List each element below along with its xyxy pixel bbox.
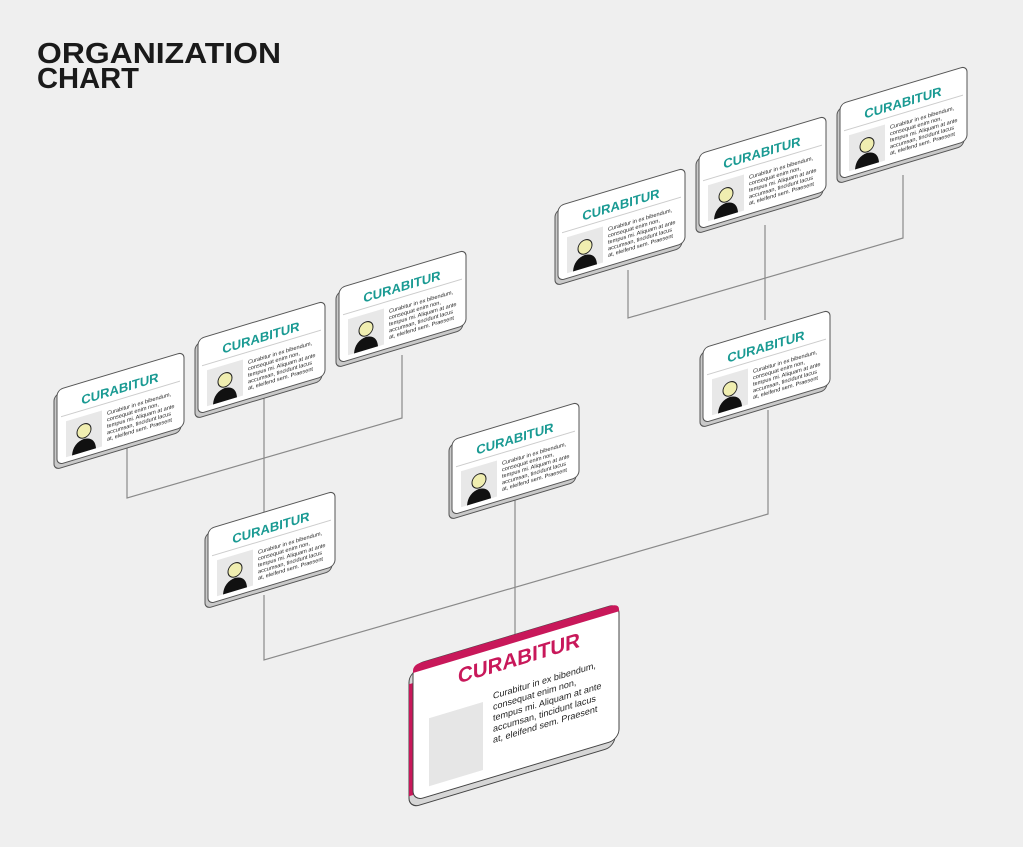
card A (54, 352, 184, 470)
card H: CURABITUR (864, 84, 942, 122)
card B: at, eleifend sem. Praesent (248, 366, 313, 392)
card G: CURABITUR (723, 134, 801, 172)
card G: consequat enim non, (749, 166, 801, 187)
card F: accumsan, tincidunt lacus (608, 227, 672, 252)
avatar (708, 174, 744, 221)
card I: CURABITUR (727, 328, 805, 366)
card G: Curabitur in ex bibendum, (749, 156, 813, 181)
card F: at, eleifend sem. Praesent (608, 233, 673, 259)
avatar (849, 124, 885, 171)
title: ORGANIZATION (37, 38, 281, 70)
title (37, 38, 281, 95)
connector lines (127, 175, 903, 660)
card F: consequat enim non, (608, 218, 660, 239)
card A: tempus mi. Aliquam at ante (107, 404, 174, 430)
card B: accumsan, tincidunt lacus (248, 360, 312, 385)
card E: CURABITUR (476, 420, 554, 458)
card I (700, 310, 830, 428)
card C (336, 250, 466, 368)
card D: CURABITUR (232, 509, 310, 547)
avatar (348, 308, 384, 355)
card E: accumsan, tincidunt lacus (502, 461, 566, 486)
card B: Curabitur in ex bibendum, (248, 341, 312, 366)
avatar (712, 368, 748, 415)
avatar (567, 226, 603, 273)
card E: Curabitur in ex bibendum, (502, 442, 566, 467)
main card: CURABITUR (458, 628, 580, 688)
card F: CURABITUR (582, 186, 660, 224)
title: CHART (37, 63, 139, 95)
card A: accumsan, tincidunt lacus (107, 411, 171, 436)
avatar (207, 359, 243, 406)
card I: tempus mi. Aliquam at ante (753, 362, 820, 388)
main card: consequat enim non, (493, 677, 576, 712)
main card: tempus mi. Aliquam at ante (493, 681, 601, 723)
main card (409, 603, 619, 808)
card B: CURABITUR (222, 319, 300, 357)
main card: Curabitur in ex bibendum, (493, 660, 596, 701)
card I: consequat enim non, (753, 360, 805, 381)
card I: at, eleifend sem. Praesent (753, 375, 818, 401)
card A: at, eleifend sem. Praesent (107, 417, 172, 443)
card H: tempus mi. Aliquam at ante (890, 118, 957, 144)
card C: consequat enim non, (389, 300, 441, 321)
card H: Curabitur in ex bibendum, (890, 106, 954, 131)
card F: tempus mi. Aliquam at ante (608, 220, 675, 246)
card E: tempus mi. Aliquam at ante (502, 454, 569, 480)
avatar (217, 549, 253, 596)
card C: Curabitur in ex bibendum, (389, 290, 453, 315)
card B: consequat enim non, (248, 351, 300, 372)
card D: Curabitur in ex bibendum, (258, 531, 322, 556)
card F: Curabitur in ex bibendum, (608, 208, 672, 233)
card G: tempus mi. Aliquam at ante (749, 168, 816, 194)
card G: at, eleifend sem. Praesent (749, 181, 814, 207)
card E: consequat enim non, (502, 452, 554, 473)
card H: accumsan, tincidunt lacus (890, 125, 954, 150)
main card: at, eleifend sem. Praesent (493, 704, 598, 745)
card D: consequat enim non, (258, 541, 310, 562)
card H: consequat enim non, (890, 116, 942, 137)
card G (696, 116, 826, 234)
card B: tempus mi. Aliquam at ante (248, 353, 315, 379)
card C: tempus mi. Aliquam at ante (389, 302, 456, 328)
card D: tempus mi. Aliquam at ante (258, 543, 325, 569)
card H: at, eleifend sem. Praesent (890, 131, 955, 157)
card I: accumsan, tincidunt lacus (753, 369, 817, 394)
card D (205, 491, 335, 609)
avatar (461, 460, 497, 507)
card F (555, 168, 685, 286)
card A: Curabitur in ex bibendum, (107, 392, 171, 417)
card C: at, eleifend sem. Praesent (389, 315, 454, 341)
card C: CURABITUR (363, 268, 441, 306)
card C: accumsan, tincidunt lacus (389, 309, 453, 334)
card A: consequat enim non, (107, 402, 159, 423)
main card: accumsan, tincidunt lacus (493, 693, 596, 734)
card I: Curabitur in ex bibendum, (753, 350, 817, 375)
card H (837, 66, 967, 184)
card E (449, 402, 579, 520)
card D: accumsan, tincidunt lacus (258, 550, 322, 575)
card A: CURABITUR (81, 370, 159, 408)
avatar (66, 410, 102, 457)
card G: accumsan, tincidunt lacus (749, 175, 813, 200)
card E: at, eleifend sem. Praesent (502, 467, 567, 493)
card D: at, eleifend sem. Praesent (258, 556, 323, 582)
card B (195, 301, 325, 419)
